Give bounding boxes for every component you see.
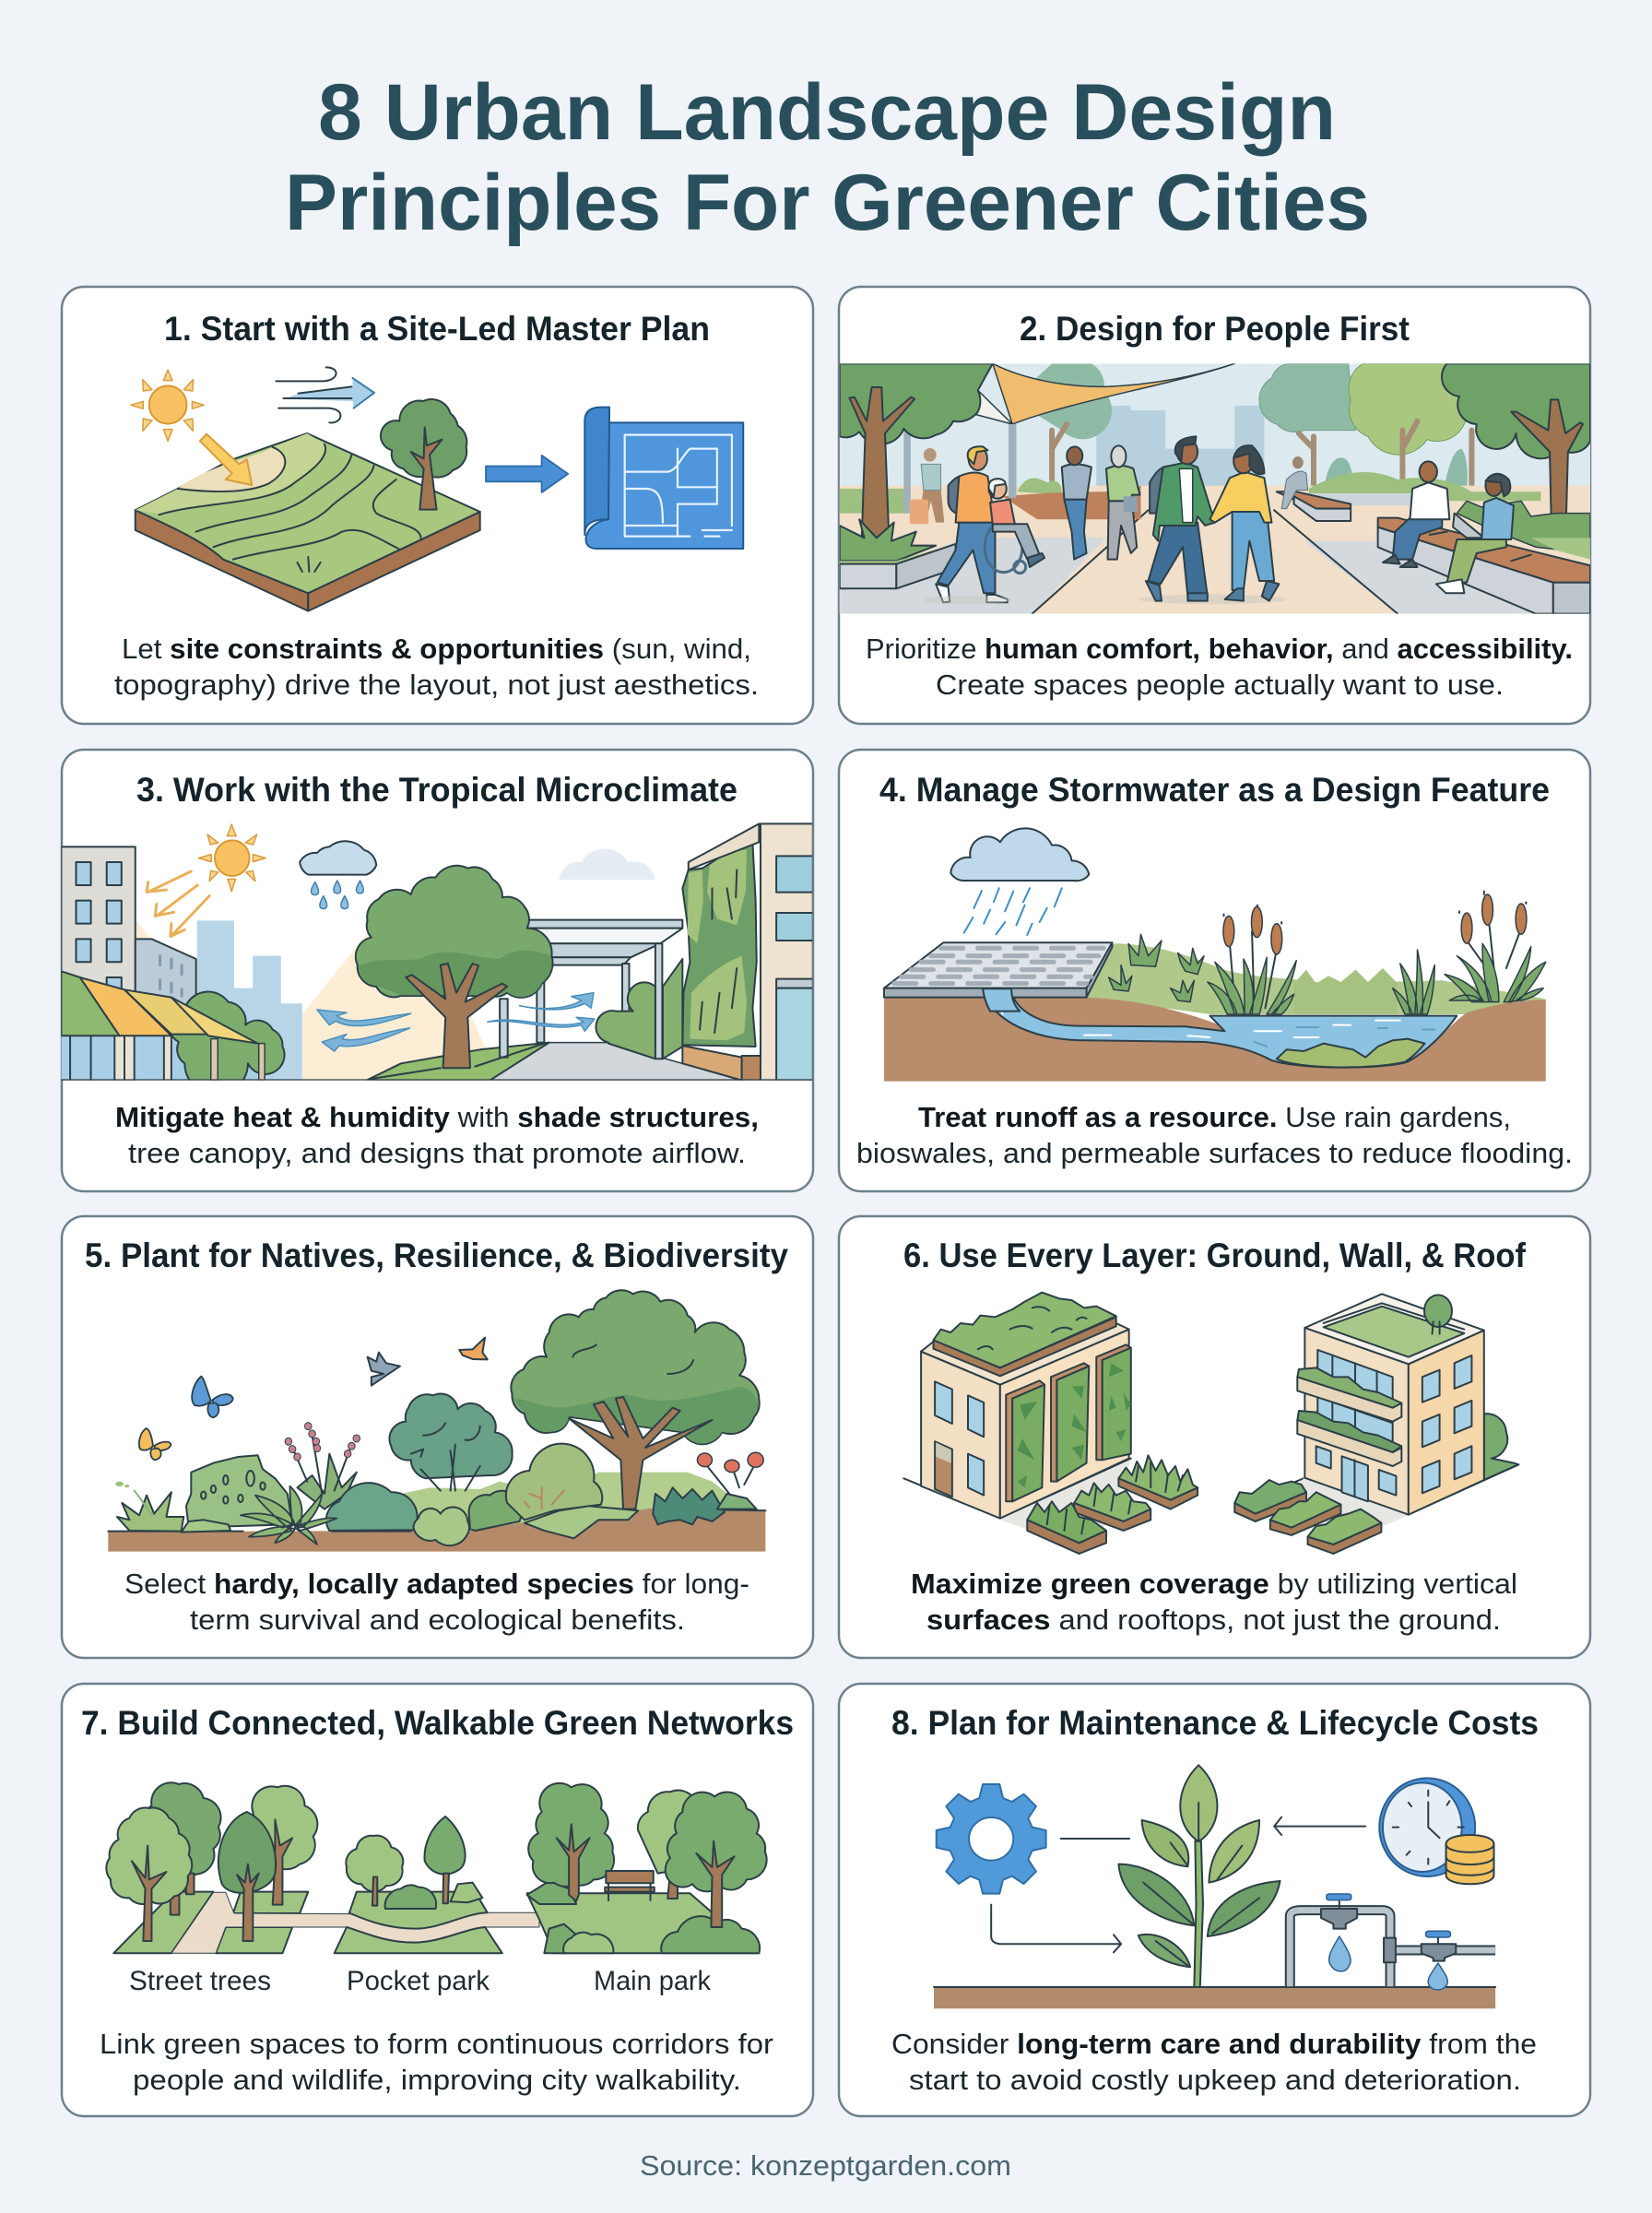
reeds and plants (1109, 892, 1546, 1014)
body text 8: start to avoid costly upkeep and deterioration. (909, 2064, 1521, 2096)
faint cloud (559, 848, 655, 880)
right building (689, 823, 813, 1081)
icon: gear (937, 1784, 1046, 1894)
icon: irrigation pipes and valves (1290, 1894, 1495, 1990)
body text 3 (115, 1101, 759, 1169)
heading 8: 8. Plan for Maintenance & Lifecycle Costs (891, 1704, 1539, 1742)
pavement and path (840, 472, 1590, 614)
soil (934, 1987, 1495, 2008)
icon: wind arrow (276, 367, 374, 422)
background grasses (401, 1473, 747, 1531)
planters right (1234, 1480, 1381, 1554)
warm glow and skyline (136, 919, 500, 1081)
round teal shrub (326, 1483, 418, 1531)
heading 2: 2. Design for People First (1020, 310, 1410, 348)
illustration: stormwater section (884, 828, 1546, 1082)
map labels (129, 1966, 712, 1996)
body text 8 (891, 2028, 1537, 2096)
icon: sun (198, 824, 266, 892)
person walking with backpack (936, 446, 1008, 602)
sail canopy (903, 363, 1234, 514)
body text 1: topography) drive the layout, not just aesthetics. (114, 669, 759, 701)
illustration: street microclimate (61, 823, 813, 1095)
title (285, 68, 1370, 247)
hedges and green wall (596, 843, 761, 1081)
body text 4 (856, 1101, 1573, 1169)
soil (884, 998, 1546, 1082)
pocket park (335, 1817, 502, 1953)
heading 3: 3. Work with the Tropical Microclimate (136, 771, 738, 809)
title: 8 Urban Landscape Design (318, 68, 1336, 157)
left tree (840, 363, 993, 538)
body text 7: people and wildlife, improving city walkability. (133, 2064, 741, 2096)
panel: 8 maintenance and lifecycle (839, 1684, 1590, 2116)
people: mid couple (1062, 445, 1139, 560)
body text 6 (911, 1568, 1517, 1636)
sky and skyline (840, 363, 1590, 614)
body text 3: Mitigate heat & humidity with shade structures, (115, 1101, 759, 1133)
body text 5 (124, 1568, 749, 1636)
icon: sun ray arrow (200, 434, 252, 485)
far bench with person (1277, 456, 1351, 521)
body text 4: bioswales, and permeable surfaces to reduce flooding. (856, 1137, 1573, 1169)
connector lines (991, 1817, 1365, 1952)
main tree (356, 866, 553, 1079)
permeable pavement (884, 942, 1112, 1012)
body text 1: Let site constraints & opportunities (sun, wind, (122, 633, 751, 665)
illustration: connected parks (106, 1782, 767, 1953)
panel: 1 site-led master plan (62, 287, 813, 724)
hill and grass (1087, 943, 1546, 1014)
body text 2 (866, 633, 1573, 701)
panel: 6 ground wall roof (839, 1216, 1590, 1658)
panel: 3 tropical microclimate (61, 750, 813, 1191)
ground shadows (924, 595, 1287, 604)
map labels: Street trees (129, 1966, 271, 1996)
right building (1234, 1294, 1518, 1554)
body text 4: Treat runoff as a resource. Use rain gardens, (918, 1101, 1511, 1133)
main park (527, 1783, 767, 1953)
terrain block (136, 433, 480, 611)
low shrubs (413, 1444, 638, 1545)
illustration: site terrain and blueprint (131, 367, 743, 611)
balcony planters (1297, 1367, 1401, 1466)
mid shrub tree (389, 1393, 513, 1491)
lavender flowers (285, 1423, 360, 1509)
body text 2: Create spaces people actually want to use. (936, 669, 1504, 701)
body text 7 (100, 2028, 773, 2096)
body text 2: Prioritize human comfort, behavior, and accessibility. (866, 633, 1573, 665)
icon: butterflies and birds (139, 1338, 488, 1460)
body text 8: Consider long-term care and durability from the (891, 2028, 1537, 2060)
body text 5: term survival and ecological benefits. (190, 1604, 685, 1636)
planters left (1027, 1455, 1198, 1554)
icon: sun (131, 370, 204, 441)
icon: bench (605, 1871, 655, 1900)
grass tuft left (115, 1482, 183, 1532)
back tree and front trees street (106, 1782, 317, 1941)
street shopfront, hedge and awning (61, 970, 286, 1081)
heading 6: 6. Use Every Layer: Ground, Wall, & Roof (903, 1237, 1527, 1274)
airflow arrows (317, 993, 595, 1051)
heading 1: 1. Start with a Site-Led Master Plan (164, 310, 710, 348)
illustration: planting bed (108, 1290, 765, 1552)
illustration: greened buildings (903, 1293, 1518, 1554)
body text 5: Select hardy, locally adapted species for long- (124, 1568, 749, 1600)
couple holding hands (1146, 436, 1279, 601)
person far left (910, 448, 944, 524)
illustration: plant with maintenance icons (934, 1765, 1495, 2008)
pond (983, 988, 1457, 1068)
panel: 5 natives and biodiversity (62, 1216, 813, 1658)
person in wheelchair (985, 479, 1044, 574)
heading 5: 5. Plant for Natives, Resilience, & Biodiversity (85, 1237, 788, 1274)
soil (108, 1508, 765, 1552)
ground and lawn (366, 1043, 742, 1081)
sun ray arrows (147, 871, 209, 937)
planter and shrub (840, 519, 956, 588)
body text 6: Maximize green coverage by utilizing vertical (911, 1568, 1517, 1600)
panel: 7 green networks (62, 1684, 813, 2116)
panel: 2 people first (839, 287, 1590, 724)
plant (1118, 1765, 1280, 1987)
buildings left (61, 846, 196, 1081)
icon: rain cloud (950, 828, 1089, 935)
icon: clock and coins (1379, 1778, 1494, 1884)
arrow to blueprint (486, 456, 568, 492)
icon: blueprint (584, 408, 743, 549)
pergola (500, 920, 682, 1059)
body text 1 (114, 633, 759, 701)
right trees (1440, 363, 1590, 514)
heading 4: 4. Manage Stormwater as a Design Feature (879, 771, 1550, 809)
body text 3: tree canopy, and designs that promote airflow. (128, 1137, 746, 1169)
body text 6: surfaces and rooftops, not just the ground. (926, 1604, 1501, 1636)
panel: 4 stormwater (839, 750, 1590, 1191)
roof tree (1424, 1295, 1452, 1334)
body text 7: Link green spaces to form continuous corridors for (100, 2028, 773, 2060)
green wall panels (1006, 1344, 1131, 1501)
heading 7: 7. Build Connected, Walkable Green Networks (81, 1704, 794, 1742)
title: Principles For Greener Cities (285, 159, 1370, 247)
big tree (511, 1290, 760, 1509)
dark shrub and flowers (653, 1452, 763, 1524)
agave plant (241, 1486, 336, 1544)
long bench with two people (1378, 461, 1590, 614)
left building (903, 1293, 1198, 1554)
map labels: Main park (594, 1966, 712, 1996)
illustration: plaza with people (840, 363, 1590, 614)
street trees block (113, 1892, 539, 1953)
bushy shrub (182, 1455, 292, 1533)
source note: Source: konzeptgarden.com (640, 2149, 1011, 2182)
icon: rain cloud (300, 841, 376, 909)
map labels: Pocket park (347, 1966, 490, 1996)
icon: tree (381, 399, 466, 510)
